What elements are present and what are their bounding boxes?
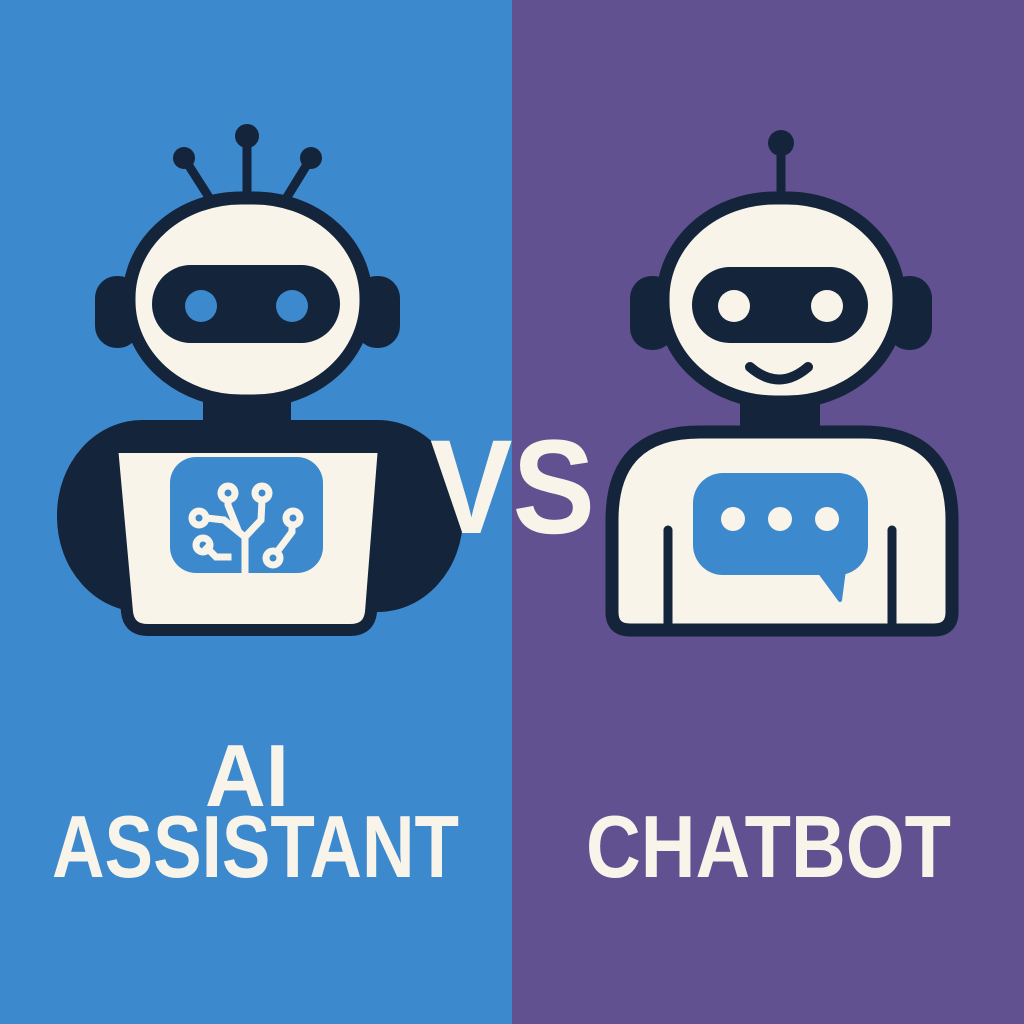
- label: AI ASSISTANT: AI: [205, 726, 289, 825]
- icon: speech bubble: [693, 473, 868, 600]
- torso: [612, 432, 952, 630]
- icon: circuit tree chip: [170, 457, 323, 573]
- arms / shoulders: [57, 420, 463, 612]
- visor: [152, 265, 340, 343]
- icon: chatbot robot: [612, 130, 952, 630]
- neck: [203, 395, 291, 435]
- antennas: [173, 124, 322, 202]
- label: AI ASSISTANT: [52, 726, 459, 896]
- eyes: [718, 290, 750, 322]
- ears: [95, 276, 140, 348]
- head: [663, 198, 899, 402]
- panel: ai assistant background: [0, 0, 512, 1024]
- torso: [112, 447, 384, 630]
- head: [129, 198, 366, 401]
- visor: [692, 267, 868, 343]
- arm lines: [664, 530, 672, 625]
- panel: chatbot background: [512, 0, 1024, 1024]
- antenna: [776, 145, 786, 200]
- smile: [750, 367, 808, 380]
- neck: [740, 398, 820, 438]
- eyes: [185, 290, 217, 322]
- icon: ai assistant robot: [57, 124, 463, 630]
- heading: VS: VS: [430, 413, 595, 562]
- label: CHATBOT: CHATBOT: [586, 797, 951, 896]
- label: AI ASSISTANT: ASSISTANT: [52, 797, 459, 896]
- ears: [630, 276, 675, 350]
